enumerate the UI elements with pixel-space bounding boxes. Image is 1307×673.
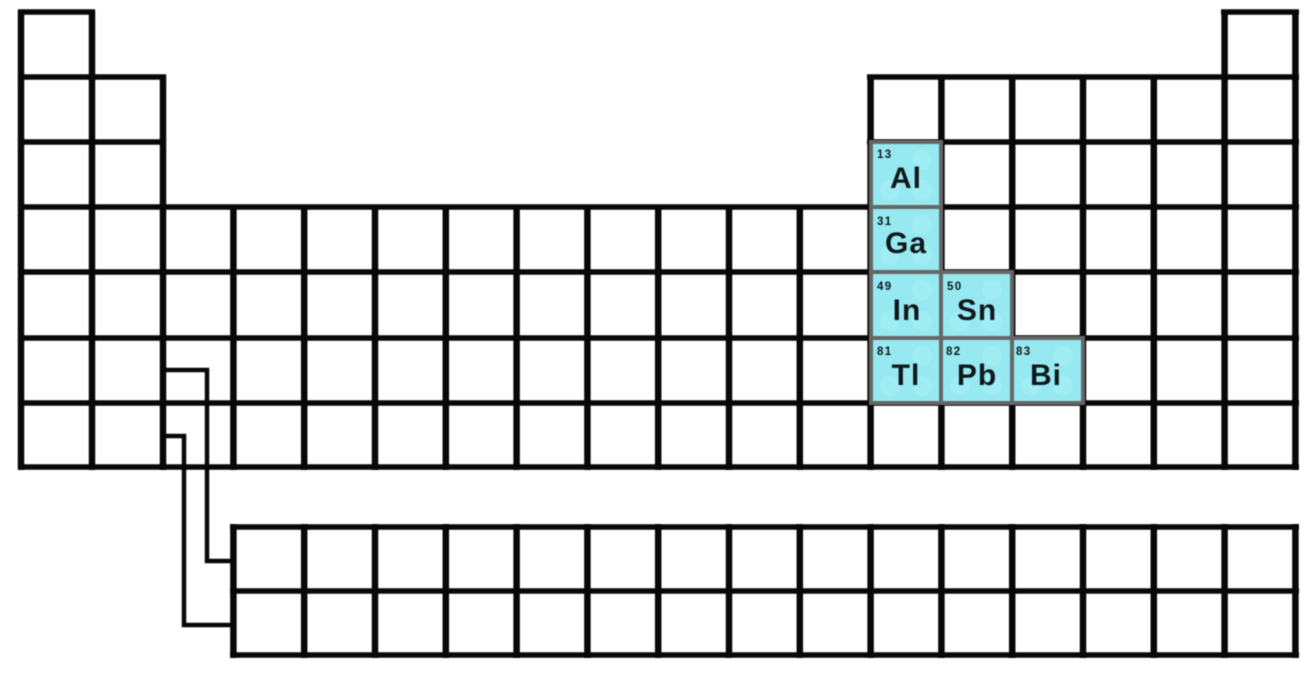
main periodic table grid [18, 10, 1299, 470]
element: indium: 49 [877, 281, 893, 293]
connector: period 6 to lanthanides [163, 370, 233, 561]
element: aluminium [871, 142, 941, 207]
element: lead [941, 338, 1012, 403]
element: thallium: Tl [892, 359, 920, 392]
element: gallium [871, 207, 941, 272]
element: lead: Pb [957, 359, 997, 392]
element: aluminium: Al [890, 162, 922, 195]
element: tin: 50 [947, 281, 963, 293]
element: bismuth [1012, 338, 1083, 403]
element: thallium [871, 338, 941, 403]
element: tin: Sn [957, 294, 997, 327]
element: indium: In [893, 294, 921, 327]
element: bismuth: Bi [1030, 359, 1062, 392]
element: aluminium: 13 [877, 149, 893, 161]
connector: period 7 to actinides [163, 436, 233, 625]
lanthanide and actinide grid [230, 524, 1299, 658]
element: gallium: Ga [885, 227, 927, 260]
element: lead: 82 [946, 346, 962, 358]
element: indium [871, 272, 941, 338]
highlighted elements [871, 142, 1083, 403]
element: thallium: 81 [877, 346, 893, 358]
element: gallium: 31 [877, 216, 893, 228]
element: tin [941, 272, 1012, 338]
element: bismuth: 83 [1016, 346, 1032, 358]
